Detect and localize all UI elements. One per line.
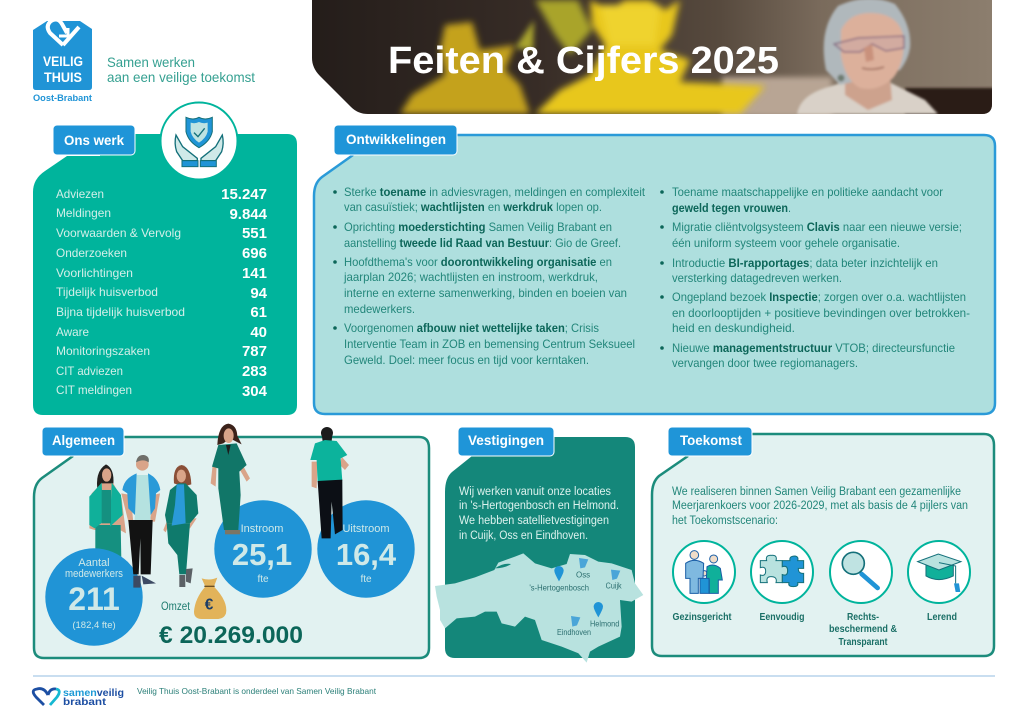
tab: Ontwikkelingen: Ontwikkelingen: [346, 131, 446, 147]
stat circle: Aantal medewerkers: [45, 548, 143, 646]
text: meerjarenkoers: het Toekomstscenario:: [672, 515, 778, 527]
map: Noord-Brabant: [435, 553, 643, 663]
tab: Ontwikkelingen: [334, 125, 457, 155]
map labels: [529, 570, 622, 637]
text: meerjarenkoers: [672, 486, 968, 527]
panel: Vestigingen: [435, 427, 643, 663]
amount: omzet: € 20.269.000: [159, 622, 303, 649]
stat circle: Uitstroom: Uitstroom: [342, 523, 390, 535]
tab: Ons werk: [53, 125, 135, 155]
list: values: 787: [242, 343, 267, 360]
stat circle: Aantal medewerkers: medewerkers: [65, 568, 123, 580]
tab: Algemeen: [42, 427, 124, 456]
list: values: 141: [242, 265, 267, 282]
illustration: woman in green jacket: [89, 464, 126, 558]
stat circle: Instroom: fte: [257, 574, 269, 585]
list: labels: Bijna tijdelijk huisverbod: [56, 305, 185, 319]
list: labels: Adviezen: [56, 187, 104, 201]
stat circle: Instroom: 25,1: [232, 537, 292, 572]
illustration: woman in dark green suit: [163, 465, 198, 587]
tagline: aan een veilige toekomst: [107, 69, 255, 85]
footer logo: Samen Veilig Brabant: [33, 687, 124, 708]
right bullet list: Migratie cliëntvolgsysteem Clavis naar een nieuwe versie;: [672, 220, 962, 234]
left bullet list: Oprichting moederstichting Samen Veilig Brabant en: [344, 220, 612, 234]
stat circle: Uitstroom: [317, 500, 415, 598]
pillar: Rechtsbeschermend & Transparant: Rechts-: [847, 611, 879, 623]
satellite icons: [571, 558, 620, 627]
icon: money bag: €: [205, 596, 214, 613]
right bullet list: en doorlooptijden + positieve bevindingen over betrokken-: [672, 306, 970, 320]
pillar: Lerend: Lerend: [927, 611, 957, 623]
list: values: 9.844: [229, 206, 268, 223]
logo: Veilig Thuis Oost-Brabant: [33, 20, 93, 104]
tab: Toekomst: [668, 427, 752, 456]
title: Feiten & Cijfers 2025: [388, 40, 779, 82]
panel: Algemeen: [34, 424, 429, 658]
list: values: 94: [250, 285, 268, 302]
left bullet list: [333, 185, 646, 367]
list: values: 61: [250, 304, 267, 321]
label: Omzet: Omzet: [161, 601, 191, 613]
map pin: Helmond: [594, 602, 603, 617]
pillar: Gezinsgericht: [672, 541, 735, 623]
left bullet list: jaarplan 2026; wachtlijsten en instroom, werkdruk,: [343, 270, 598, 284]
header photo banner: [312, 0, 995, 117]
left bullet list: Geweld. Doel: meer focus en tijd voor kerntaken.: [344, 353, 589, 367]
pillar: Lerend: [908, 541, 970, 623]
map labels: Helmond: [590, 620, 619, 629]
text: locaties: in Cuijk, Oss en Eindhoven.: [459, 530, 588, 542]
list: values: 15.247: [221, 186, 267, 203]
list: values: [221, 186, 268, 400]
tab: Algemeen: Algemeen: [52, 432, 115, 448]
list: values: 696: [242, 245, 267, 262]
panel: Toekomst: [33, 427, 995, 708]
left bullet list: aanstelling tweede lid Raad van Bestuur: Gio de Greef.: [344, 236, 621, 250]
text: meerjarenkoers: Meerjarenkoers voor 2026-2029, met als basis de 4 pijlers van: [672, 500, 968, 512]
pillar: Gezinsgericht: Gezinsgericht: [672, 611, 732, 623]
illustration: man seen from behind (uitstroom): [310, 427, 349, 538]
list: values: 551: [242, 225, 267, 242]
map pin: 's-Hertogenbosch: [554, 566, 564, 581]
icon: money bag: [194, 578, 226, 619]
stat circle: Uitstroom: fte: [360, 574, 372, 585]
list: values: 283: [242, 363, 267, 380]
tab: Ons werk: Ons werk: [64, 132, 124, 148]
right bullet list: geweld tegen vrouwen.: [672, 201, 791, 215]
text: locaties: [459, 486, 619, 542]
logo: Veilig Thuis Oost-Brabant: Oost-Brabant: [33, 93, 93, 104]
pillar: Rechtsbeschermend & Transparant: Transparant: [838, 636, 888, 648]
tab: Vestigingen: [458, 427, 554, 456]
stat circle: Aantal medewerkers: 211: [68, 581, 120, 617]
right bullet list: Toename maatschappelijke en politieke aandacht voor: [672, 185, 943, 199]
left bullet list: Voorgenomen afbouw niet wettelijke taken; Crisis: [344, 321, 599, 335]
list: labels: Tijdelijk huisverbod: [56, 285, 158, 299]
text: locaties: in 's-Hertogenbosch en Helmond.: [459, 500, 619, 512]
list: labels: CIT meldingen: [56, 383, 132, 397]
list: labels: CIT adviezen: [56, 364, 123, 378]
right bullet list: Nieuwe managementstructuur VTOB; directeursfunctie: [672, 341, 955, 355]
pillar: Rechtsbeschermend & Transparant: beschermend &: [829, 623, 897, 635]
right bullet list: vervangen door twee regiomanagers.: [672, 356, 858, 370]
list: labels: Voorlichtingen: [56, 266, 133, 280]
right bullet list: één uniform systeem voor gehele organisatie.: [672, 236, 900, 250]
stat circle: Aantal medewerkers: (182,4 fte): [72, 620, 116, 631]
list: labels: Meldingen: [56, 206, 111, 220]
list: values: 40: [250, 324, 267, 341]
list: labels: Monitoringszaken: [56, 344, 150, 358]
tab: Vestigingen: Vestigingen: [468, 432, 544, 448]
right bullet list: [660, 185, 970, 370]
map labels: Oss: [576, 570, 590, 579]
left bullet list: Hoofdthema's voor doorontwikkeling organisatie en: [344, 255, 612, 269]
stat circle: Uitstroom: 16,4: [336, 537, 397, 572]
panel: Ons werk: [33, 102, 297, 415]
illustration: man in blue jacket: [121, 455, 160, 588]
list: labels: Aware: [56, 325, 89, 339]
portrait of elderly woman: [797, 0, 938, 114]
illustration: standing woman (instroom): [211, 424, 250, 534]
left bullet list: Interventie Team in ZOB en bemensing Centrum Seksueel: [344, 337, 635, 351]
list: labels: Voorwaarden & Vervolg: [56, 226, 181, 240]
stat circle: Instroom: Instroom: [241, 523, 283, 535]
pillar: Rechtsbeschermend & Transparant: [829, 541, 897, 648]
logo: Veilig Thuis Oost-Brabant: VEILIG: [43, 53, 83, 69]
map labels: 's-Hertogenbosch: [529, 584, 589, 593]
logo: Veilig Thuis Oost-Brabant: THUIS: [44, 69, 82, 85]
stat circle: Aantal medewerkers: Aantal: [78, 557, 110, 569]
left bullet list: van casuïstiek; wachtlijsten en werkdruk lopen op.: [344, 200, 602, 214]
left bullet list: Sterke toename in adviesvragen, meldingen en complexiteit: [344, 185, 646, 199]
footer logo: Samen Veilig Brabant: brabant: [63, 696, 107, 708]
right bullet list: versterking datagedreven werken.: [672, 271, 842, 285]
list: labels: [56, 187, 185, 397]
list: labels: Onderzoeken: [56, 246, 127, 260]
right bullet list: heid en deskundigheid.: [672, 321, 795, 335]
text: locaties: Wij werken vanuit onze locaties: [459, 486, 611, 498]
tagline: Samen werken: [107, 54, 195, 70]
left bullet list: medewerkers.: [344, 302, 415, 316]
footer logo: Samen Veilig Brabant: samenveilig: [63, 687, 124, 699]
right bullet list: Ongepland bezoek Inspectie; zorgen over o.a. wachtlijsten: [672, 290, 966, 304]
list: values: 304: [242, 383, 268, 400]
tagline: [107, 54, 255, 85]
panel: Ontwikkelingen: [314, 125, 995, 414]
pillar: Eenvoudig: Eenvoudig: [760, 611, 804, 623]
icon: shield and hands: [160, 102, 238, 180]
text: meerjarenkoers: We realiseren binnen Samen Veilig Brabant een gezamenlijke: [672, 486, 961, 498]
footer text: Veilig Thuis Oost-Brabant is onderdeel van Samen Veilig Brabant: [137, 686, 377, 696]
left bullet list: interne en externe samenwerking, binden en boeien van: [344, 286, 627, 300]
pillar: Eenvoudig: [751, 541, 813, 623]
tab: Toekomst: Toekomst: [680, 432, 742, 448]
stat circle: Instroom: [214, 500, 312, 598]
right bullet list: Introductie BI-rapportages; data beter inzichtelijk en: [672, 256, 938, 270]
map labels: Eindhoven: [557, 628, 591, 637]
map labels: Cuijk: [606, 581, 622, 590]
text: locaties: We hebben satellietvestigingen: [459, 515, 609, 527]
